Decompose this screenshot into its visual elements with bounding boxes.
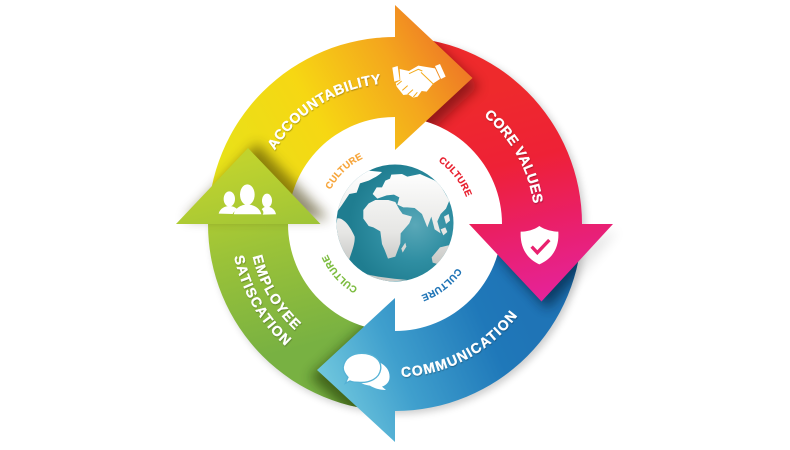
arrowhead: accountability xyxy=(395,5,472,150)
infographic: culture cycle xyxy=(176,5,613,442)
culture label: blue: CULTURE xyxy=(421,269,462,302)
arc: core values xyxy=(395,37,582,224)
label: employee satisfaction: SATISCATION xyxy=(234,256,292,347)
globe xyxy=(336,164,454,282)
label: employee satisfaction: EMPLOYEE xyxy=(252,254,302,332)
arc: employee satisfaction xyxy=(208,224,395,411)
icon: handshake xyxy=(392,64,446,98)
arrowhead: core values xyxy=(469,224,613,302)
label: communication: COMMUNICATION xyxy=(401,310,518,378)
arrowhead shadows xyxy=(185,13,619,449)
label: core values: CORE VALUES xyxy=(486,110,544,204)
culture label: green: CULTURE xyxy=(322,254,356,292)
arrowhead: communication xyxy=(317,298,395,442)
icon: speech bubbles xyxy=(343,353,390,390)
culture label: orange: CULTURE xyxy=(326,152,363,189)
arc: accountability xyxy=(208,37,395,224)
ring soft shadow xyxy=(120,0,585,414)
label: accountability: ACCOUNTABILITY xyxy=(268,74,380,152)
icon: people xyxy=(219,184,276,215)
icon: shield check xyxy=(521,226,558,264)
arc: communication xyxy=(395,224,582,411)
culture label: red: CULTURE xyxy=(440,157,472,197)
arrowhead: employee satisfaction xyxy=(176,148,320,224)
